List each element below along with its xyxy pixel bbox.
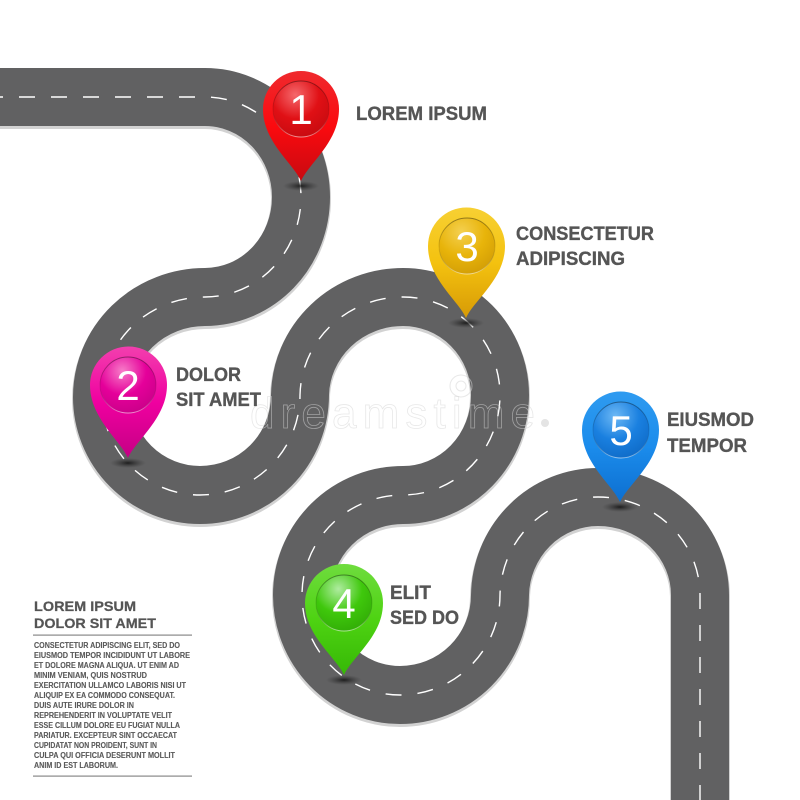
pin 1: 1 <box>289 86 313 133</box>
pin 5: 5 <box>609 407 633 454</box>
watermark: dreamstime <box>250 389 535 438</box>
block heading <box>34 598 156 631</box>
block body: EIUSMOD TEMPOR INCIDIDUNT UT LABORE <box>34 651 191 660</box>
road <box>0 97 700 800</box>
label 2: DOLOR <box>176 365 241 386</box>
pin 2: 2 <box>116 362 140 409</box>
pin 2 <box>90 346 167 468</box>
label 2: SIT AMET <box>176 390 261 411</box>
block body: CONSECTETUR ADIPISCING ELIT, SED DO <box>34 641 180 650</box>
pin 4: 4 <box>332 580 356 627</box>
label 4 <box>390 583 459 629</box>
block body: PARIATUR. EXCEPTEUR SINT OCCAECAT <box>34 731 177 740</box>
block body: CULPA QUI OFFICIA DESERUNT MOLLIT <box>34 751 175 760</box>
label 3 <box>516 224 654 270</box>
label 4: ELIT <box>390 583 431 604</box>
pin 5 <box>582 392 659 512</box>
block body <box>34 641 191 770</box>
label 3: CONSECTETUR <box>516 224 654 245</box>
block body: REPREHENDERIT IN VOLUPTATE VELIT <box>34 711 172 720</box>
block body: ANIM ID EST LABORUM. <box>34 761 118 770</box>
block heading: DOLOR SIT AMET <box>34 615 156 631</box>
block body: MINIM VENIAM, QUIS NOSTRUD <box>34 671 147 680</box>
text block <box>33 598 192 777</box>
block body: ESSE CILLUM DOLORE EU FUGIAT NULLA <box>34 721 180 730</box>
label 3: ADIPISCING <box>516 249 625 270</box>
label 4: SED DO <box>390 608 459 629</box>
pin 4 <box>305 564 383 685</box>
block body: ALIQUIP EX EA COMMODO CONSEQUAT. <box>34 691 175 700</box>
label 5 <box>667 410 754 457</box>
block body: ET DOLORE MAGNA ALIQUA. UT ENIM AD <box>34 661 179 670</box>
label 2 <box>176 365 261 411</box>
label 1: LOREM IPSUM <box>356 104 487 125</box>
block body: EXERCITATION ULLAMCO LABORIS NISI UT <box>34 681 186 690</box>
label 5: TEMPOR <box>667 436 747 457</box>
pin 3 <box>428 208 505 328</box>
block heading: LOREM IPSUM <box>34 598 136 614</box>
block body: CUPIDATAT NON PROIDENT, SUNT IN <box>34 741 157 750</box>
pin 3: 3 <box>455 223 479 270</box>
pin 1 <box>263 71 339 191</box>
label 5: EIUSMOD <box>667 410 754 431</box>
block body: DUIS AUTE IRURE DOLOR IN <box>34 701 134 710</box>
